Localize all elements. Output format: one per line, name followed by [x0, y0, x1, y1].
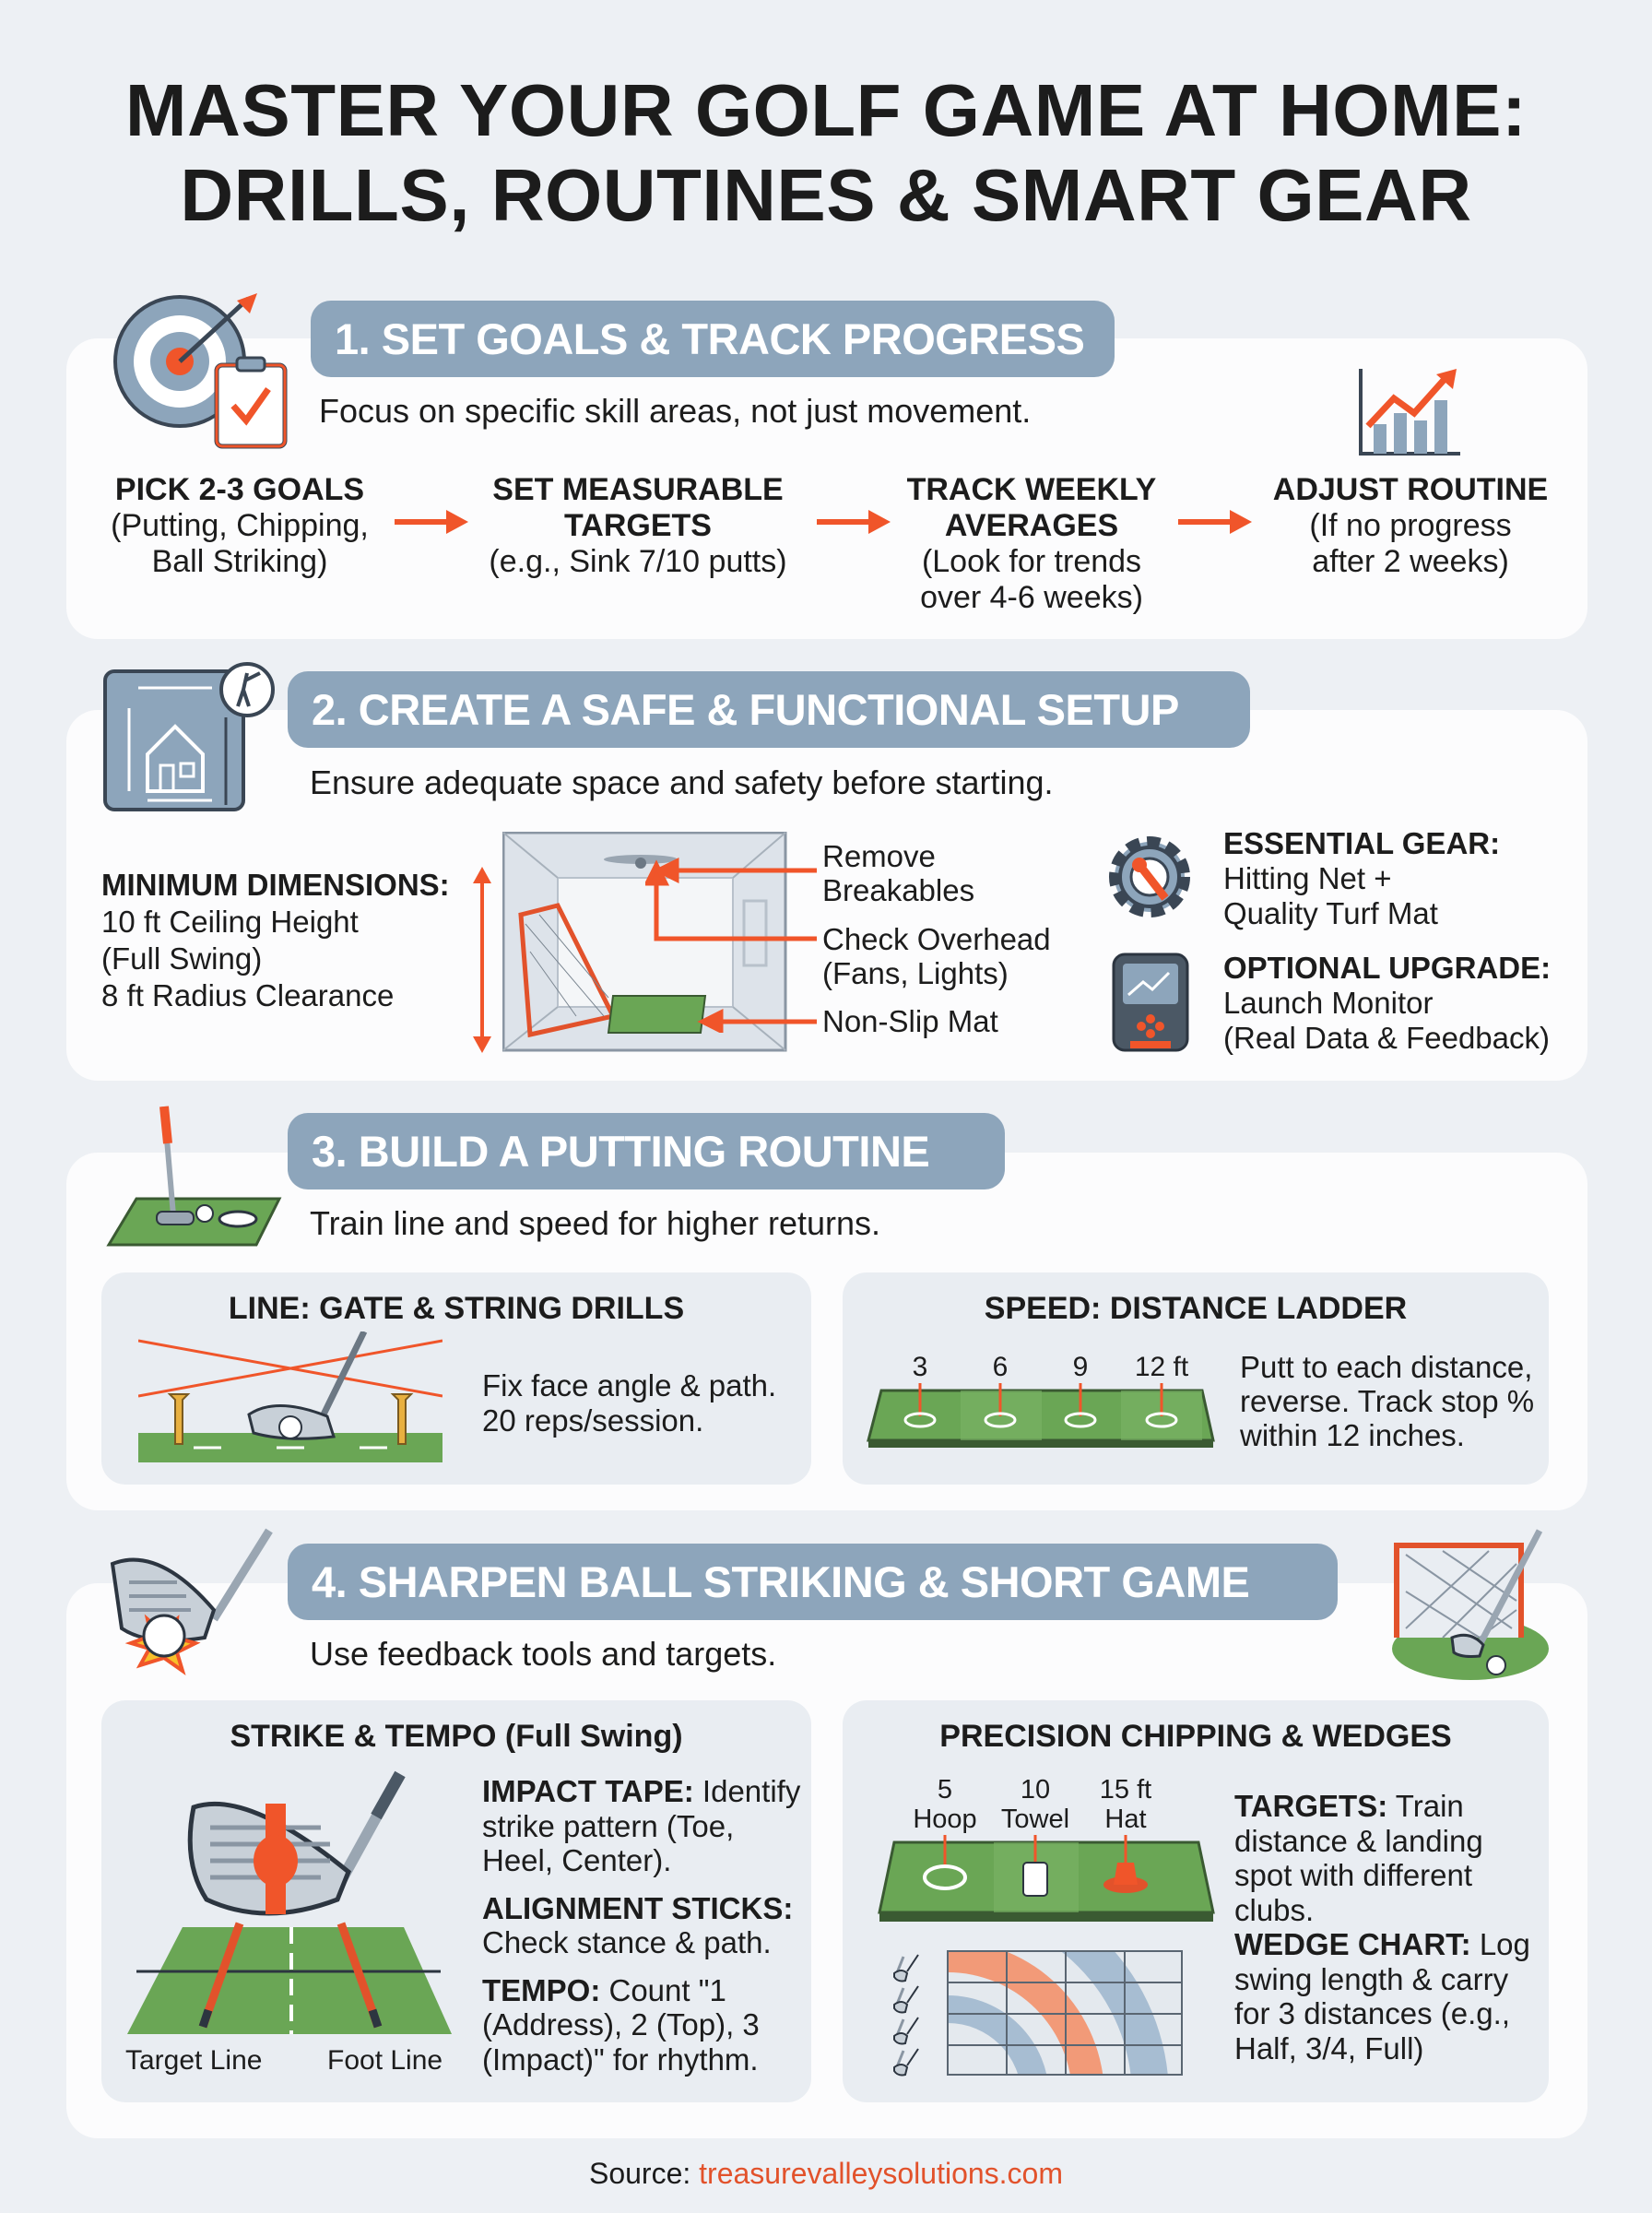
heading: 3	[288, 1113, 1005, 1189]
heading: 1: 1. SET GOALS & TRACK PROGRESS	[335, 314, 1084, 363]
text: chipping tips	[1234, 1789, 1530, 2065]
step: pick goals: (Putting, Chipping,	[111, 508, 369, 543]
callout labels	[822, 839, 974, 907]
icon: putter	[106, 1106, 282, 1247]
text: strike tips	[482, 1774, 800, 2077]
illustration: targets mat: 15 ft	[1100, 1775, 1151, 1805]
text: chipping tips: clubs.	[1234, 1892, 1314, 1927]
text: strike tips: Check stance & path.	[482, 1925, 772, 1959]
callout label mat: Non-Slip Mat	[822, 1004, 998, 1038]
subtitle: speed: SPEED: DISTANCE LADDER	[985, 1291, 1407, 1326]
step: pick goals: Ball Striking)	[152, 544, 327, 579]
heading: 4: 4. SHARPEN BALL STRIKING & SHORT GAME	[312, 1557, 1249, 1606]
callout arrows	[645, 858, 817, 1033]
text: chipping tips: distance & landing	[1234, 1824, 1483, 1857]
subpanel: chipping	[843, 1700, 1549, 2102]
subpanel: speed ladder	[843, 1272, 1549, 1485]
step: track weekly: TRACK WEEKLY	[907, 472, 1156, 507]
step: pick goals	[111, 472, 369, 579]
illustration: gate drill	[138, 1331, 442, 1462]
icon: blueprint	[103, 662, 275, 811]
text: speed	[1240, 1350, 1534, 1452]
subpanel: line drills	[101, 1272, 811, 1485]
text: lead 1: Focus on specific skill areas, not just movement.	[319, 392, 1031, 430]
text: strike tips: (Address), 2 (Top), 3	[482, 2007, 760, 2041]
step: adjust: (If no progress	[1309, 508, 1512, 543]
text: strike tips: ALIGNMENT STICKS:	[482, 1890, 793, 1925]
panel: 1 set goals	[66, 338, 1587, 639]
text: minimum dimensions	[101, 868, 450, 1012]
illustration: club face	[188, 1770, 406, 1916]
illustration: ladder: 9	[1073, 1352, 1088, 1382]
step: set targets	[489, 472, 787, 579]
step: set targets: (e.g., Sink 7/10 putts)	[489, 544, 787, 579]
illustration: targets mat: Hat	[1104, 1805, 1147, 1834]
illustration: ladder: 12 ft	[1135, 1352, 1189, 1382]
text: chipping tips: for 3 distances (e.g.,	[1234, 1996, 1510, 2030]
illustration: ladder: 6	[993, 1352, 1008, 1382]
panel: 4 ball striking	[66, 1583, 1587, 2138]
illustration: alignment sticks	[127, 1922, 452, 2034]
text: chipping tips: Half, 3/4, Full)	[1234, 2030, 1423, 2065]
text: strike tips: strike pattern (Toe,	[482, 1809, 734, 1842]
text: line	[482, 1368, 776, 1438]
illustration: targets mat: Towel	[1001, 1805, 1069, 1834]
text: strike tips: (Impact)" for rhythm.	[482, 2041, 759, 2077]
arrow	[817, 510, 891, 534]
subtitle: line: LINE: GATE & STRING DRILLS	[229, 1291, 684, 1326]
subtitle: chipping: PRECISION CHIPPING & WEDGES	[939, 1719, 1452, 1754]
chart: wedge chart	[893, 1950, 1183, 2077]
heading: 2	[288, 671, 1250, 748]
text: optional upgrade: (Real Data & Feedback)	[1223, 1021, 1550, 1055]
step: track weekly: (Look for trends	[922, 544, 1141, 579]
heading: 4	[288, 1544, 1338, 1620]
subpanel: strike and tempo	[101, 1700, 811, 2102]
illustration: targets mat: 5	[938, 1775, 952, 1805]
text: minimum dimensions: MINIMUM DIMENSIONS:	[101, 868, 450, 902]
icon: net	[1392, 1529, 1549, 1680]
step: set targets: SET MEASURABLE	[492, 472, 784, 507]
text: minimum dimensions: 10 ft Ceiling Height	[101, 905, 359, 939]
callout label overhead: Check Overhead	[822, 922, 1051, 956]
source: Source: treasurevalleysolutions.com	[589, 2157, 1063, 2190]
heading: 3: 3. BUILD A PUTTING ROUTINE	[312, 1127, 929, 1176]
text: optional upgrade: OPTIONAL UPGRADE:	[1223, 951, 1551, 985]
step: pick goals: PICK 2-3 GOALS	[115, 472, 364, 507]
icon: target and clipboard	[113, 293, 288, 448]
step: track weekly: AVERAGES	[945, 508, 1118, 543]
text: speed: reverse. Track stop %	[1240, 1384, 1534, 1418]
text: chipping tips: WEDGE CHART: Log	[1234, 1927, 1530, 1961]
illustration: ladder: 3	[913, 1352, 927, 1382]
text: speed: Putt to each distance,	[1240, 1350, 1532, 1384]
arrow	[395, 510, 468, 534]
icon: launch monitor	[1112, 953, 1189, 1051]
title	[125, 69, 1527, 236]
text: essential gear	[1223, 826, 1500, 930]
icon: iron and ball	[111, 1529, 273, 1675]
text: essential gear: Hitting Net +	[1223, 861, 1392, 895]
text: strike tips: IMPACT TAPE: Identify	[482, 1774, 800, 1808]
step: adjust: ADJUST ROUTINE	[1273, 472, 1548, 507]
callout labels: Breakables	[822, 873, 974, 907]
text: lead 3: Train line and speed for higher returns.	[310, 1204, 880, 1242]
text: minimum dimensions: (Full Swing)	[101, 941, 262, 976]
illustration: targets mat: 10	[1021, 1775, 1050, 1805]
text: essential gear: Quality Turf Mat	[1223, 896, 1438, 930]
text: minimum dimensions: 8 ft Radius Clearance	[101, 978, 394, 1012]
text: line: 20 reps/session.	[482, 1403, 703, 1438]
text: chipping tips: spot with different	[1234, 1858, 1472, 1892]
icon: gear wrench	[1109, 836, 1190, 917]
panel: 3 putting	[66, 1153, 1587, 1510]
label: foot line: Foot Line	[327, 2045, 442, 2076]
text: optional upgrade: Launch Monitor	[1223, 986, 1433, 1020]
title: DRILLS, ROUTINES & SMART GEAR	[180, 154, 1472, 236]
room illustration	[502, 832, 787, 1051]
icon: growth chart	[1359, 369, 1460, 456]
subtitle: strike: STRIKE & TEMPO (Full Swing)	[230, 1719, 683, 1754]
callout labels: Remove	[822, 839, 936, 873]
callout label overhead: (Fans, Lights)	[822, 956, 1009, 990]
step: track weekly: over 4-6 weeks)	[920, 580, 1143, 615]
text: speed: within 12 inches.	[1240, 1418, 1465, 1452]
step: track weekly	[907, 472, 1156, 615]
callout label overhead	[822, 922, 1051, 990]
arrow	[1178, 510, 1252, 534]
heading: 2: 2. CREATE A SAFE & FUNCTIONAL SETUP	[312, 685, 1179, 734]
text: essential gear: ESSENTIAL GEAR:	[1223, 826, 1500, 860]
panel: 2 setup	[66, 710, 1587, 1081]
illustration: targets mat: Hoop	[913, 1805, 977, 1834]
heading: 1	[311, 301, 1115, 377]
step: adjust: after 2 weeks)	[1312, 544, 1509, 579]
text: lead 4: Use feedback tools and targets.	[310, 1635, 776, 1673]
step: set targets: TARGETS	[564, 508, 712, 543]
title: MASTER YOUR GOLF GAME AT HOME:	[125, 69, 1527, 151]
text: chipping tips: swing length & carry	[1234, 1962, 1508, 1995]
labels: lines: Target Line	[125, 2045, 262, 2076]
text: chipping tips: TARGETS: Train	[1234, 1789, 1464, 1823]
text: line: Fix face angle & path.	[482, 1368, 776, 1402]
text: strike tips: Heel, Center).	[482, 1843, 671, 1877]
text: lead 2: Ensure adequate space and safety before starting.	[310, 763, 1054, 801]
illustration: ladder	[867, 1352, 1215, 1448]
text: strike tips: TEMPO: Count "1	[482, 1973, 726, 2006]
illustration: targets mat	[878, 1775, 1215, 1922]
text: optional upgrade	[1223, 951, 1551, 1055]
arrow: vertical height	[473, 867, 491, 1053]
step: adjust	[1273, 472, 1548, 579]
